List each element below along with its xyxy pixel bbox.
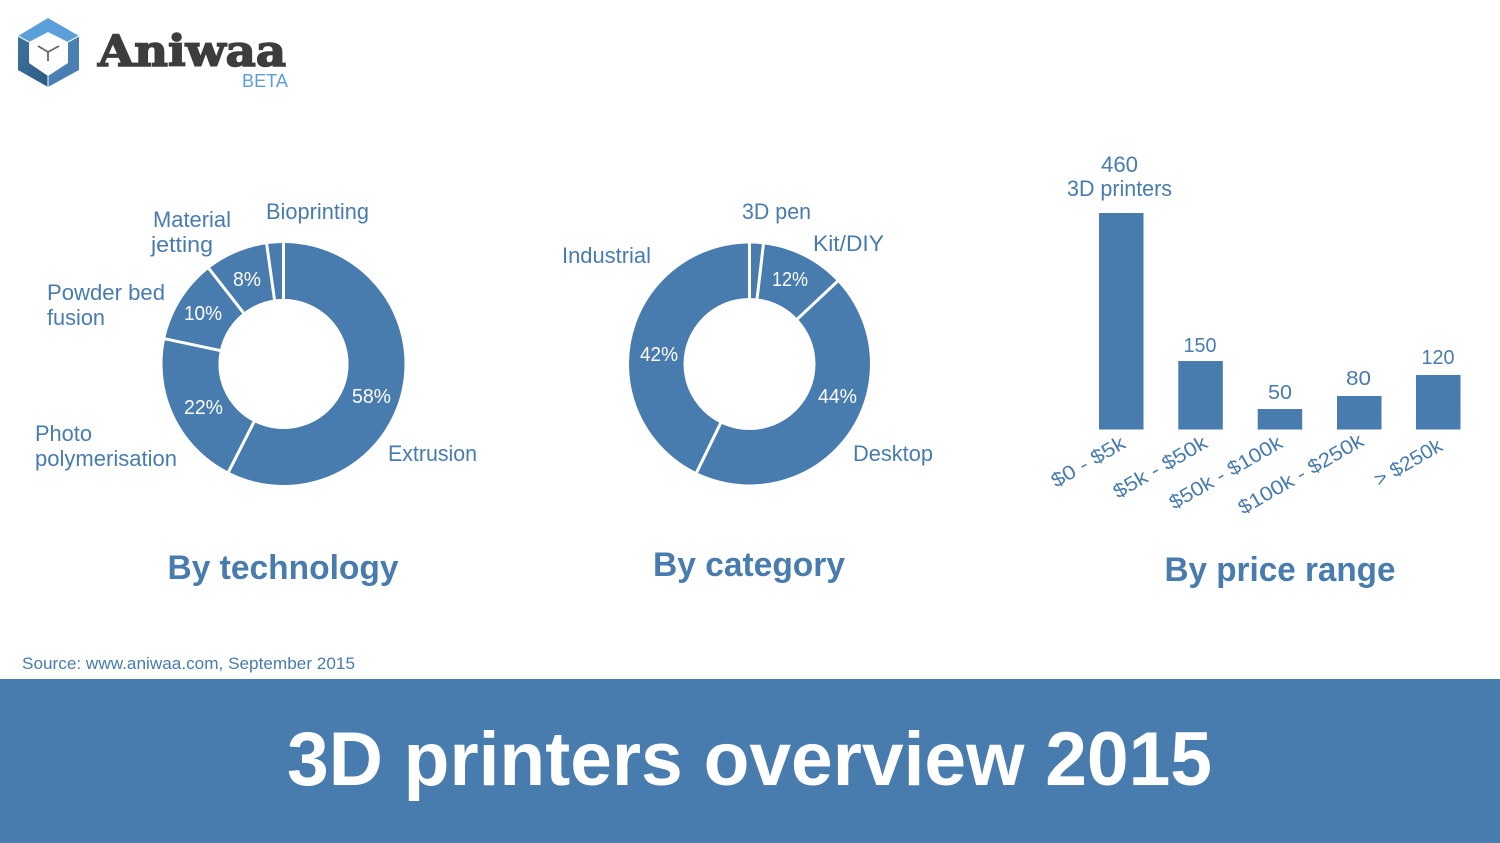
donut chart: category: 44%: [818, 386, 857, 408]
donut chart: category: 42%: [640, 344, 678, 366]
donut chart: category: 12%: [772, 269, 808, 291]
label: Bioprinting: Bioprinting: [266, 199, 369, 224]
label: Powder bed fusion: fusion: [47, 305, 105, 330]
donut chart: technology: 58%: [352, 386, 391, 408]
label: Material jetting: jetting: [150, 232, 213, 257]
bar value: 80: 80: [1346, 368, 1371, 390]
logo beta tag: BETA: [242, 71, 288, 91]
label: Material jetting: Material: [153, 207, 231, 232]
label: Photo polymerisation: [35, 421, 177, 471]
label: Material jetting: [150, 207, 231, 257]
axis label: $100k - $250k: $100k - $250k: [1234, 429, 1369, 519]
heading: By technology: By technology: [168, 549, 399, 587]
axis label: $0 - $5k: $0 - $5k: [1048, 432, 1130, 492]
label: Photo polymerisation: Photo: [35, 421, 92, 446]
title banner: [0, 679, 1500, 843]
axis label: $5k - $50k: $5k - $50k: [1110, 431, 1212, 503]
bar chart: price range: [1099, 213, 1460, 430]
donut chart: category: [640, 238, 857, 477]
donut chart: technology: 8%: [233, 269, 261, 291]
panel: by technology: [35, 199, 477, 587]
logo: Aniwaa: [18, 18, 288, 91]
label: Powder bed fusion: Powder bed: [47, 280, 165, 305]
icon: hexagonal cube: [18, 18, 79, 87]
donut chart: technology: [160, 238, 391, 476]
heading: By price range: By price range: [1164, 551, 1396, 589]
bar value: 120: 120: [1422, 347, 1454, 369]
panel: by price range: [1048, 152, 1460, 589]
heading: By category: By category: [653, 546, 845, 584]
bar value: 460 3D printers: [1067, 152, 1172, 201]
label: Industrial: Industrial: [562, 243, 651, 268]
bar value: 50: 50: [1268, 382, 1292, 404]
logo wordmark: Aniwaa: [97, 27, 286, 77]
donut chart: technology: 10%: [184, 303, 222, 325]
axis label: > $250k: > $250k: [1370, 434, 1447, 491]
title: 3D printers overview 2015: [287, 717, 1212, 802]
donut chart: technology: 22%: [184, 397, 223, 419]
panel: by category: [562, 199, 933, 584]
bar value: 150: 150: [1184, 335, 1216, 357]
axis label: $50k - $100k: $50k - $100k: [1166, 431, 1287, 514]
bar value: 460 3D printers: 3D printers: [1067, 176, 1172, 201]
label: 3D pen: 3D pen: [742, 199, 811, 224]
label: Powder bed fusion: [47, 280, 165, 330]
bar value: 460 3D printers: 460: [1101, 152, 1138, 177]
label: Desktop: Desktop: [853, 441, 933, 466]
label: Photo polymerisation: polymerisation: [35, 446, 177, 471]
label: Extrusion: Extrusion: [388, 441, 477, 466]
label: Kit/DIY: Kit/DIY: [813, 231, 884, 256]
source note: Source: www.aniwaa.com, September 2015: [22, 654, 355, 673]
